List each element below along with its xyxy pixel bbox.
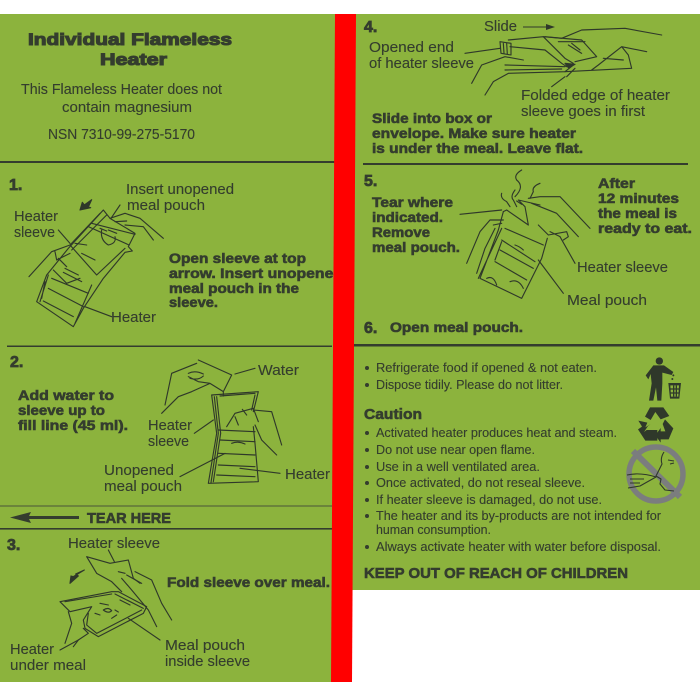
step 5 instruction: tear: meal pouch. xyxy=(372,239,460,255)
step 2 number: 2. xyxy=(10,354,23,371)
step 1 label: insert unopened meal pouch xyxy=(126,181,234,214)
step 3 label: meal pouch inside sleeve xyxy=(165,637,250,670)
illustration: tearing sleeve with steam xyxy=(460,170,590,298)
step 5 instruction: wait time: ready to eat. xyxy=(598,220,692,236)
step 4 label: slide with arrow: Slide xyxy=(484,18,517,35)
step 1 instruction: meal pouch in the xyxy=(169,280,299,296)
step 2 label: water: Water xyxy=(258,362,299,379)
panel: storage and disposal notes: Dispose tidily. Please do not litter. xyxy=(376,378,563,392)
step 3 label: meal pouch inside sleeve: Meal pouch xyxy=(165,637,245,654)
step 4 instruction: Slide into box or xyxy=(372,110,493,126)
divider: red vertical stripe xyxy=(331,14,356,682)
list: caution items: Activated heater produces heat and steam. xyxy=(376,426,617,440)
step 4 instruction xyxy=(372,110,583,156)
step 5 instruction: tear: Remove xyxy=(372,224,430,240)
step 3 label: heater sleeve: Heater sleeve xyxy=(68,535,160,552)
step 4 label: slide with arrow xyxy=(484,18,555,35)
step 3 xyxy=(7,535,330,674)
step 2 instruction: Add water to xyxy=(18,387,114,403)
step 1 label: heater sleeve xyxy=(14,208,58,241)
step 3 label: heater under meal xyxy=(10,641,86,674)
heading: caution: Caution xyxy=(364,406,422,423)
step 3 number: 3. xyxy=(7,537,20,554)
step 1 instruction: sleeve. xyxy=(169,294,218,310)
step 4 label: folded edge: sleeve goes in first xyxy=(521,103,646,120)
arrow: tear here xyxy=(10,510,171,527)
list: caution items: Use in a well ventilated area. xyxy=(376,460,540,474)
list: caution items: The heater and its by-products are not intended for xyxy=(376,509,661,523)
panel: right instructions background xyxy=(352,14,700,590)
step 1 label: insert unopened meal pouch: Insert unopened xyxy=(126,181,234,198)
step 1 label: heater sleeve: Heater xyxy=(14,208,58,225)
step 5 xyxy=(364,170,692,309)
step 5 instruction: tear xyxy=(372,194,460,255)
list: caution items: Always activate heater with water before disposal. xyxy=(376,540,661,554)
step 5 instruction: wait time: 12 minutes xyxy=(598,190,679,206)
step 4 number: 4. xyxy=(364,19,377,36)
step 3 label: meal pouch inside sleeve: inside sleeve xyxy=(165,653,250,670)
step 4 label: opened end of heater sleeve: of heater sleeve xyxy=(369,55,474,72)
step 6 xyxy=(364,319,523,337)
step 2 instruction: sleeve up to xyxy=(18,402,105,418)
step 2 instruction: fill line (45 ml). xyxy=(18,417,128,433)
step 4 xyxy=(364,18,670,156)
step 2 label: heater: Heater xyxy=(285,466,330,483)
step 5 instruction: wait time xyxy=(598,175,692,236)
text: magnesium note: This Flameless Heater does not xyxy=(21,81,223,98)
step 2 xyxy=(10,354,330,495)
list: caution items xyxy=(365,426,661,554)
icon: do not inhale or ingest xyxy=(627,447,683,501)
step 5 instruction: wait time: the meal is xyxy=(598,205,677,221)
warning: keep out of reach of children: KEEP OUT OF REACH OF CHILDREN xyxy=(364,565,628,582)
title: Individual Flameless xyxy=(28,30,232,49)
step 2 instruction xyxy=(18,387,128,433)
panel: storage and disposal notes: Refrigerate food if opened & not eaten. xyxy=(376,361,597,375)
icon: person using litter bin xyxy=(646,357,681,401)
step 4 label: opened end of heater sleeve: Opened end xyxy=(369,39,454,56)
step 1 instruction xyxy=(169,250,343,310)
step 4 label: folded edge: Folded edge of heater xyxy=(521,87,670,104)
step 2 label: unopened meal pouch xyxy=(104,462,182,495)
step 1 instruction: arrow. Insert unopened xyxy=(169,265,343,281)
step 2 label: unopened meal pouch: Unopened xyxy=(104,462,174,479)
illustration: sliding into box xyxy=(465,28,662,95)
step 2 label: heater sleeve xyxy=(148,417,192,450)
step 5 label: meal pouch: Meal pouch xyxy=(567,292,647,309)
step 1 label: insert unopened meal pouch: meal pouch xyxy=(127,197,205,214)
step 5 label: heater sleeve: Heater sleeve xyxy=(577,259,668,276)
list: caution items: human consumption. xyxy=(376,523,491,537)
step 2 label: heater sleeve: Heater xyxy=(148,417,192,434)
panel: storage and disposal notes xyxy=(365,361,597,392)
illustration: folding sleeve over meal xyxy=(60,550,172,650)
text: NSN number: NSN 7310-99-275-5170 xyxy=(48,126,195,143)
step 1 xyxy=(9,177,343,327)
step 3 instruction: Fold sleeve over meal. xyxy=(167,574,330,590)
title: Heater xyxy=(100,50,167,69)
illustration: adding water to sleeve xyxy=(162,360,282,483)
text: magnesium note: contain magnesium xyxy=(62,99,192,116)
illustration: inserting pouch in sleeve xyxy=(29,200,163,327)
step 5 instruction: tear: indicated. xyxy=(372,209,443,225)
step 2 label: heater sleeve: sleeve xyxy=(148,433,189,450)
icon: recycling symbol xyxy=(638,407,673,443)
step 3 label: heater under meal: under meal xyxy=(10,657,86,674)
list: caution items: Once activated, do not reseal sleeve. xyxy=(376,476,585,490)
step 1 instruction: Open sleeve at top xyxy=(169,250,306,266)
step 5 number: 5. xyxy=(364,173,377,190)
step 6 instruction: Open meal pouch. xyxy=(390,319,523,335)
step 4 label: opened end of heater sleeve xyxy=(369,39,474,72)
text: magnesium note xyxy=(21,81,223,116)
step 2 label: unopened meal pouch: meal pouch xyxy=(104,478,182,495)
list: caution items: If heater sleeve is damaged, do not use. xyxy=(376,493,602,507)
step 3 label: heater under meal: Heater xyxy=(10,641,54,658)
step 4 label: folded edge xyxy=(521,87,670,120)
step 6 number: 6. xyxy=(364,320,377,337)
panel: left instructions background xyxy=(0,14,336,682)
step 4 instruction: is under the meal. Leave flat. xyxy=(372,140,583,156)
step 4 instruction: envelope. Make sure heater xyxy=(372,125,577,141)
step 1 label: heater sleeve: sleeve xyxy=(14,224,55,241)
step 5 instruction: tear: Tear where xyxy=(372,194,453,210)
list: caution items: Do not use near open flame. xyxy=(376,443,535,457)
step 1 number: 1. xyxy=(9,177,22,194)
step 5 instruction: wait time: After xyxy=(598,175,636,191)
step 1 label: heater: Heater xyxy=(111,309,156,326)
title xyxy=(28,30,232,69)
label: tear here: TEAR HERE xyxy=(87,510,171,527)
